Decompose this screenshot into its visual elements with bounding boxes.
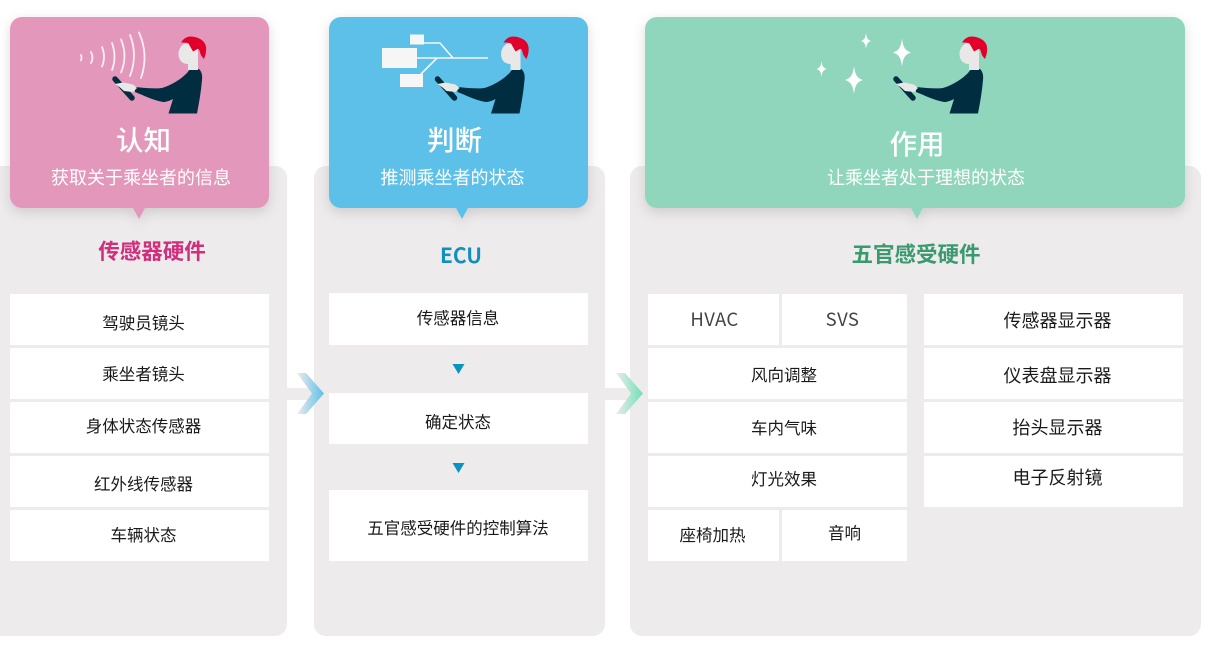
header: action: [645, 17, 1185, 219]
step: control algorithm: 五官感受硬件的控制算法: [367, 519, 549, 538]
item: cabin scent: 车内气味: [751, 419, 817, 438]
item: infrared sensor: [10, 456, 269, 507]
item: driver camera: [10, 294, 269, 345]
subtitle: action: 让乘坐者处于理想的状态: [827, 168, 1025, 188]
item: sensor display: [924, 294, 1183, 345]
item: sensor display: 传感器显示器: [1004, 311, 1112, 331]
item: airflow adjustment: [648, 348, 907, 399]
title: sensing: 认知: [116, 125, 171, 156]
item: HVAC: HVAC: [690, 306, 739, 332]
icon: signal waves: [81, 32, 145, 78]
item: head-up display: [924, 402, 1183, 453]
item: lighting effects: 灯光效果: [751, 470, 817, 489]
icon: sparkles: [816, 33, 911, 94]
subtitle: sensing: 获取关于乘坐者的信息: [51, 168, 231, 188]
list: displays: [924, 294, 1183, 507]
item: electronic mirror: [924, 456, 1183, 507]
icon: flow diagram: [382, 34, 488, 87]
step: control algorithm: [329, 490, 588, 561]
item: airflow adjustment: 风向调整: [751, 366, 817, 385]
flow: ECU steps: [329, 293, 588, 561]
panel: action background: [630, 166, 1201, 636]
item: passenger camera: 乘坐者镜头: [102, 365, 185, 384]
heading: five senses hardware: 五官感受硬件: [851, 242, 981, 267]
item: electronic mirror: 电子反射镜: [1012, 468, 1102, 488]
item: audio: 音响: [828, 524, 861, 543]
item: passenger camera: [10, 348, 269, 399]
title: action: 作用: [890, 129, 944, 160]
item: infrared sensor: 红外线传感器: [94, 475, 194, 494]
item: driver camera: 驾驶员镜头: [102, 314, 185, 333]
panel: sensing background: [0, 166, 287, 636]
title: judgment: 判断: [427, 125, 482, 156]
item: SVS: [782, 294, 907, 345]
item: head-up display: 抬头显示器: [1012, 418, 1102, 438]
step: determine state: [329, 393, 588, 444]
arrow: judgment to action: [605, 373, 643, 414]
heading: ECU: ECU: [440, 240, 482, 270]
list: sensor hardware: [10, 294, 269, 561]
grid: actuators: [648, 294, 907, 561]
item: body state sensor: 身体状态传感器: [86, 417, 202, 436]
item: HVAC: [648, 294, 779, 345]
icon: person with remote: [115, 36, 206, 114]
heading: sensor hardware: 传感器硬件: [98, 239, 206, 264]
header: judgment: [329, 17, 588, 219]
arrow: down one: [452, 364, 464, 374]
item: SVS: SVS: [826, 306, 859, 332]
step: determine state: 确定状态: [425, 413, 491, 432]
item: instrument display: 仪表盘显示器: [1004, 366, 1112, 386]
arrow: down two: [452, 463, 464, 473]
icon: person with remote: [896, 36, 987, 114]
item: cabin scent: [648, 402, 907, 453]
item: body state sensor: [10, 402, 269, 453]
panel: judgment background: [314, 166, 605, 636]
icon: person with remote: [438, 36, 529, 114]
item: audio: [782, 510, 907, 561]
step: sensor information: [329, 293, 588, 345]
item: vehicle state: [10, 510, 269, 561]
arrow: sensing to judgment: [287, 373, 324, 414]
subtitle: judgment: 推测乘坐者的状态: [380, 168, 524, 188]
item: instrument display: [924, 348, 1183, 399]
item: seat heating: [648, 510, 779, 561]
header: sensing: [10, 17, 269, 219]
step: sensor information: 传感器信息: [417, 309, 499, 328]
item: seat heating: 座椅加热: [680, 526, 746, 545]
item: lighting effects: [648, 456, 907, 507]
item: vehicle state: 车辆状态: [110, 526, 176, 545]
